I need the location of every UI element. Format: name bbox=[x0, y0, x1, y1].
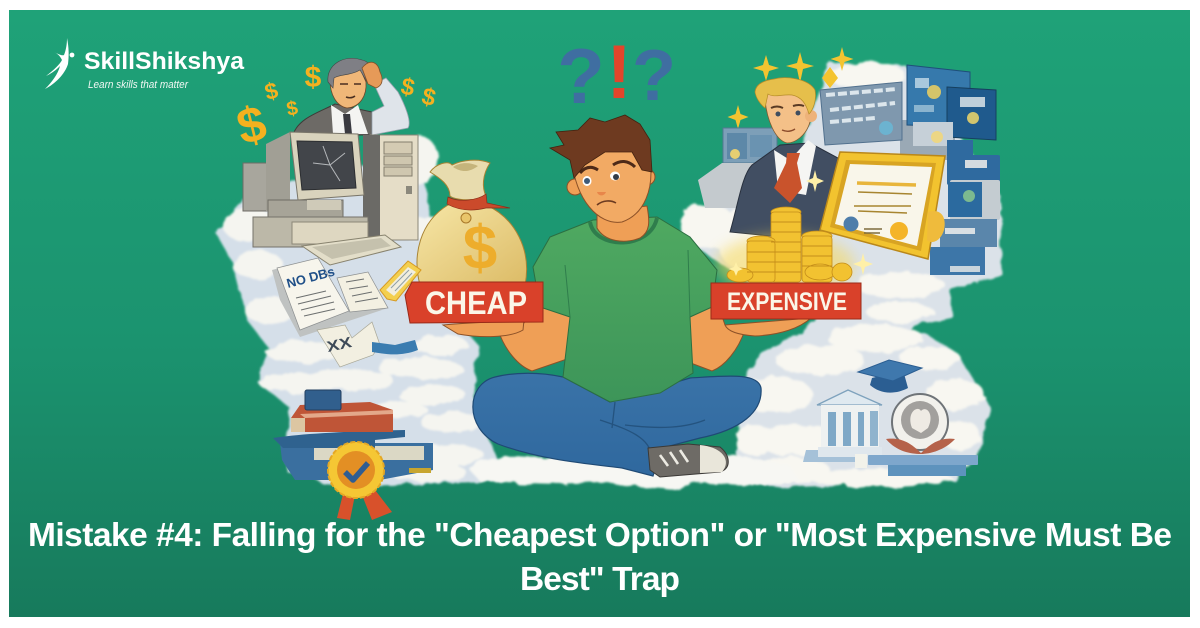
cracked CRT monitor bbox=[290, 132, 364, 200]
gold coin stacks bbox=[715, 170, 873, 295]
award rosette with checkmark bbox=[328, 442, 392, 520]
icon: falling dollar signs: $ bbox=[231, 94, 272, 156]
framed certificate bbox=[820, 152, 945, 259]
expensive label block bbox=[711, 283, 861, 319]
expensive label block: EXPENSIVE bbox=[727, 288, 847, 316]
cloud: beneath the seated figure bbox=[470, 455, 800, 490]
graduation cap bbox=[858, 360, 922, 393]
stacked books bbox=[273, 390, 433, 480]
icon: falling dollar signs: $ bbox=[262, 77, 281, 105]
open book: NO DBs bbox=[272, 258, 388, 337]
icon: falling dollar signs: $ bbox=[419, 83, 439, 112]
face bbox=[567, 145, 655, 222]
institution seal bbox=[886, 394, 955, 454]
university building bbox=[817, 390, 882, 447]
seated confused man bbox=[443, 30, 811, 477]
arms bbox=[498, 305, 745, 371]
old desktop base bbox=[243, 132, 368, 247]
logo: SkillShikshya bbox=[45, 38, 245, 91]
icon: falling dollar signs: $ bbox=[285, 97, 300, 121]
confident businessman bbox=[730, 78, 840, 238]
confusion marks: ? bbox=[557, 32, 605, 120]
title: Mistake #4: Falling for the "Cheapest Option" or "Most Expensive Must Be bbox=[28, 517, 1172, 554]
old computer tower bbox=[363, 135, 418, 240]
sparkle stars bbox=[728, 47, 854, 129]
scene: expensive option bbox=[698, 47, 1000, 476]
neck bbox=[597, 206, 649, 241]
title: Best" Trap bbox=[520, 561, 680, 598]
icon: falling dollar signs: $ bbox=[305, 61, 322, 94]
glowing monitor wall bbox=[698, 65, 996, 208]
money bag on cheap block bbox=[417, 160, 527, 285]
keyboard bbox=[302, 235, 401, 265]
tagline: Learn skills that matter bbox=[88, 79, 189, 91]
cloud: right side bbox=[680, 62, 1002, 488]
hands bbox=[443, 318, 811, 337]
high-end server stack bbox=[900, 120, 1000, 275]
icon: falling dollar signs: $ bbox=[398, 73, 418, 102]
cloud: left side bbox=[215, 136, 505, 488]
book platform bbox=[803, 447, 978, 476]
open book: NO DBs: NO DBs bbox=[285, 264, 336, 291]
jeans bbox=[473, 373, 761, 476]
crumpled paper with crosses: XX bbox=[325, 334, 353, 356]
icon: leaping figure bbox=[45, 38, 74, 89]
icon: falling dollar signs bbox=[231, 61, 439, 156]
cheap label block: CHEAP bbox=[425, 285, 527, 321]
brand name: SkillShikshya bbox=[84, 48, 245, 75]
money bag on cheap block: $ bbox=[463, 214, 497, 283]
sneaker bbox=[648, 444, 728, 477]
spiky hair bbox=[550, 115, 652, 178]
price tag bbox=[380, 261, 421, 301]
green t-shirt bbox=[533, 217, 717, 402]
worried businessman bbox=[293, 58, 409, 135]
confusion marks: ? bbox=[632, 36, 676, 116]
confusion marks: ! bbox=[606, 30, 632, 115]
confusion marks bbox=[557, 30, 676, 120]
title bbox=[28, 517, 1172, 598]
crumpled paper with crosses bbox=[317, 322, 418, 367]
scene: cheap option bbox=[231, 58, 439, 520]
